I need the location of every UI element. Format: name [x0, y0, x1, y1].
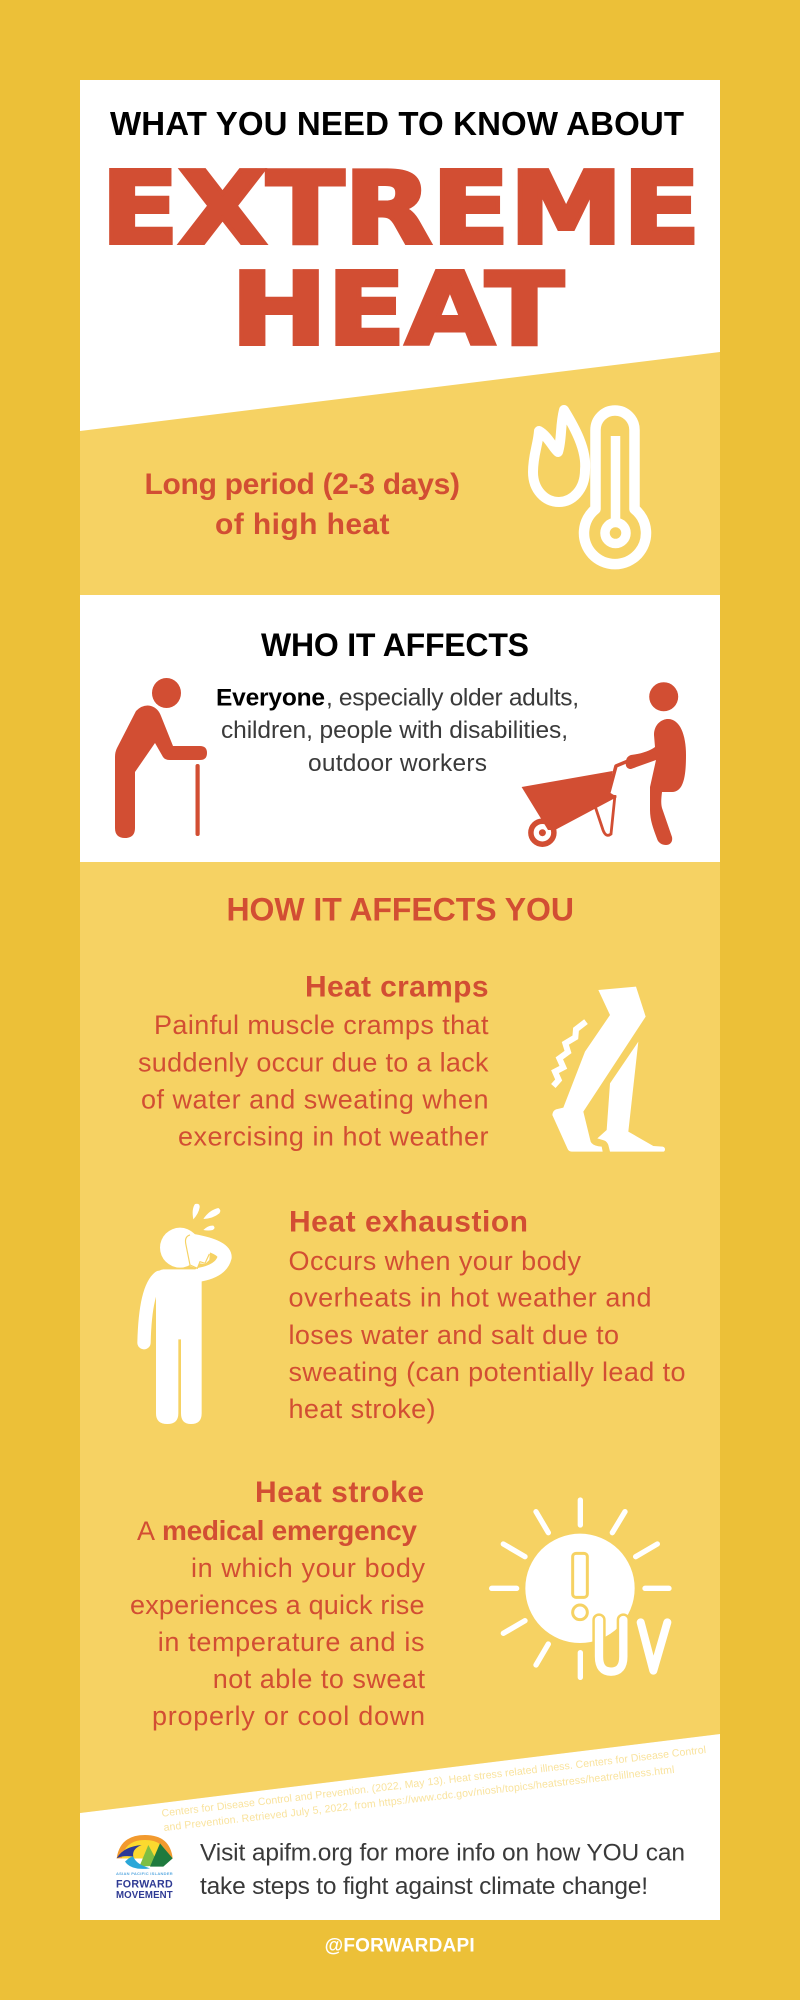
- logo: Asian Pacific Islander Forward Movement: [116, 1835, 173, 1901]
- icon: sun with UV warning: [492, 1500, 669, 1677]
- text: heat exhaustion: [288, 1206, 686, 1424]
- text: heat exhaustion: sweating (can potentially lead to: [288, 1357, 686, 1387]
- heading: what you need to know about: WHAT YOU NEED TO KNOW ABOUT: [110, 105, 684, 142]
- text: heat cramps: exercising in hot weather: [178, 1122, 488, 1152]
- footer call to action: take steps to fight against climate change!: [200, 1873, 648, 1900]
- text: heat exhaustion: Heat exhaustion: [289, 1206, 528, 1239]
- title: heat: HEAT: [231, 251, 564, 368]
- text: heat stroke: not able to sweat: [213, 1664, 425, 1694]
- heading: who it affects: WHO IT AFFECTS: [261, 627, 529, 663]
- text: heat stroke: in which your body: [191, 1553, 426, 1583]
- text: heat exhaustion: heat stroke): [288, 1394, 436, 1424]
- footer call to action: Visit apifm.org for more info on how YOU can: [200, 1840, 685, 1867]
- text: heat exhaustion: Occurs when your body: [288, 1246, 582, 1276]
- definition text: of high heat: [215, 508, 390, 541]
- text: heat stroke: experiences a quick rise: [130, 1590, 424, 1620]
- who it affects description: [216, 685, 579, 777]
- panel: footer: [80, 1734, 720, 1920]
- who it affects description: children, people with disabilities,: [221, 717, 568, 744]
- text: heat cramps: Heat cramps: [305, 971, 488, 1004]
- icon: leg cramp: [552, 987, 665, 1152]
- citation: and Prevention. Retrieved July 5, 2022, from https://www.cdc.gov/niosh/topics/heatstress/heatrelillness.html: [163, 1764, 675, 1834]
- text: heat stroke: properly or cool down: [152, 1701, 425, 1731]
- logo: Asian Pacific Islander Forward Movement: ASIAN PACIFIC ISLANDER: [116, 1871, 173, 1876]
- definition text: Long period (2-3 days): [144, 468, 460, 501]
- footer call to action: [200, 1840, 685, 1900]
- icon: older adult with cane: [115, 678, 207, 838]
- who it affects description: outdoor workers: [308, 750, 487, 777]
- panel: how it affects you: [80, 862, 720, 1813]
- text: heat cramps: of water and sweating when: [141, 1084, 488, 1114]
- heading: how it affects you: HOW IT AFFECTS YOU: [226, 892, 574, 928]
- title: extreme: EXTREME: [101, 150, 700, 267]
- text: heat exhaustion: loses water and salt due to: [288, 1320, 619, 1350]
- icon: worker with wheelbarrow: [522, 682, 686, 845]
- text: heat stroke: A: [137, 1516, 155, 1546]
- citation: Centers for Disease Control and Prevention. (2022, May 13). Heat stress related illness. Centers for Disease Control: [161, 1744, 707, 1820]
- panel: who it affects: [80, 595, 720, 862]
- text: heat cramps: suddenly occur due to a lack: [138, 1048, 489, 1078]
- text: heat stroke: Heat stroke: [255, 1476, 424, 1509]
- panel: definition: [80, 352, 720, 595]
- text: heat exhaustion: overheats in hot weather and: [288, 1283, 652, 1313]
- who it affects description: , especially older adults,: [326, 685, 579, 712]
- text: heat stroke: [130, 1476, 426, 1731]
- logo: Asian Pacific Islander Forward Movement: MOVEMENT: [116, 1890, 173, 1901]
- icon: flame and thermometer: [533, 410, 646, 564]
- text: heat stroke: medical emergency: [162, 1515, 417, 1546]
- text: heat stroke: in temperature and is: [158, 1627, 424, 1657]
- social handle: @FORWARDAPI: [325, 1936, 475, 1957]
- panel: title: [80, 80, 720, 435]
- icon: person with heat exhaustion: [144, 1204, 225, 1424]
- text: heat cramps: [138, 971, 489, 1152]
- text: heat cramps: Painful muscle cramps that: [154, 1010, 489, 1040]
- logo: Asian Pacific Islander Forward Movement: FORWARD: [116, 1878, 173, 1890]
- who it affects description: Everyone: [216, 685, 325, 712]
- definition text: [144, 468, 460, 541]
